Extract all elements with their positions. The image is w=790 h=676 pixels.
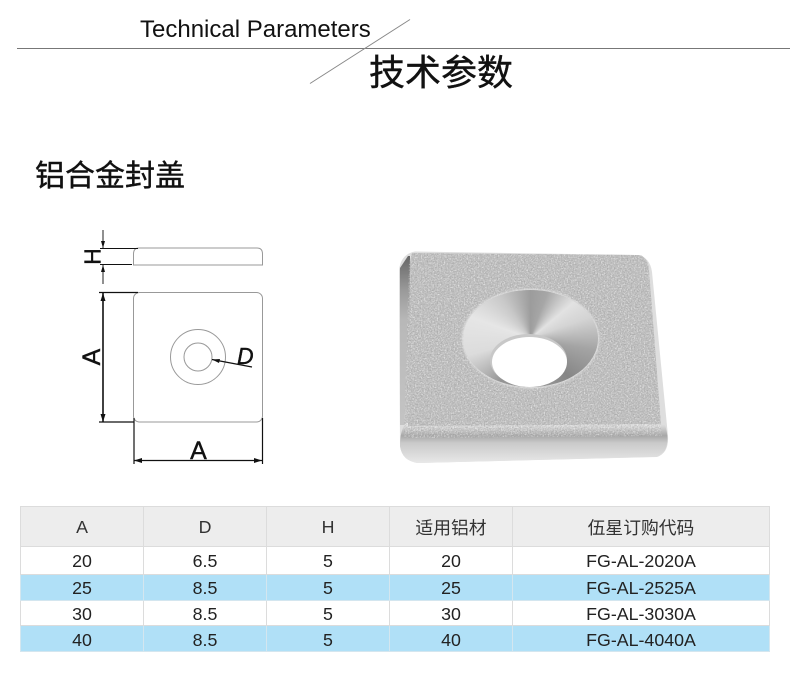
specification table: A: [76, 517, 88, 537]
dimension A vertical: A: [78, 348, 106, 365]
specification table: 30: [441, 604, 461, 624]
specification table: 30: [72, 604, 92, 624]
specification table: 8.5: [193, 630, 217, 650]
specification table: FG-AL-4040A: [586, 630, 696, 650]
dimension H: H: [80, 248, 106, 265]
surface grain light: [404, 253, 662, 438]
specification table: 6.5: [193, 551, 217, 571]
top view: [134, 292, 262, 422]
dimension D: D: [237, 343, 254, 369]
english heading: Technical Parameters: [140, 16, 371, 43]
specification table: 40: [72, 630, 92, 650]
plate top face: [408, 253, 661, 426]
specification table: 25: [441, 578, 461, 598]
dimension A horizontal: [134, 418, 262, 465]
heading divider with diagonal stroke: [17, 19, 790, 84]
specification table: 伍星订购代码: [588, 514, 694, 540]
specification table: FG-AL-3030A: [586, 604, 696, 624]
specification table: 8.5: [193, 604, 217, 624]
dimension A vertical: [78, 292, 138, 422]
specification table: FG-AL-2525A: [586, 578, 696, 598]
specification table: H: [322, 517, 334, 537]
specification table: 5: [323, 604, 333, 624]
through hole: [492, 336, 566, 386]
specification table: 适用铝材: [415, 514, 487, 540]
side view: [134, 248, 262, 265]
plate body: [399, 252, 668, 463]
dimension H: [80, 230, 138, 284]
dimension D: [212, 343, 254, 369]
specification table: 20: [72, 551, 92, 571]
countersink: [462, 290, 598, 387]
specification table: 25: [72, 578, 92, 598]
product name heading: 铝合金封盖: [35, 151, 185, 195]
specification table: 5: [323, 578, 333, 598]
specification table: 5: [323, 630, 333, 650]
specification table: [20, 506, 770, 652]
surface grain dark: [404, 253, 662, 438]
dimension A horizontal: A: [190, 437, 207, 465]
specification table: 5: [323, 551, 333, 571]
specification table: 8.5: [193, 578, 217, 598]
specification table: D: [199, 517, 211, 537]
dimension drawing: [78, 230, 264, 465]
chinese heading: 技术参数: [369, 44, 513, 96]
specification table: 20: [441, 551, 461, 571]
specification table: FG-AL-2020A: [586, 551, 696, 571]
product photo: square metal cap: [399, 252, 668, 463]
specification table: 40: [441, 630, 461, 650]
